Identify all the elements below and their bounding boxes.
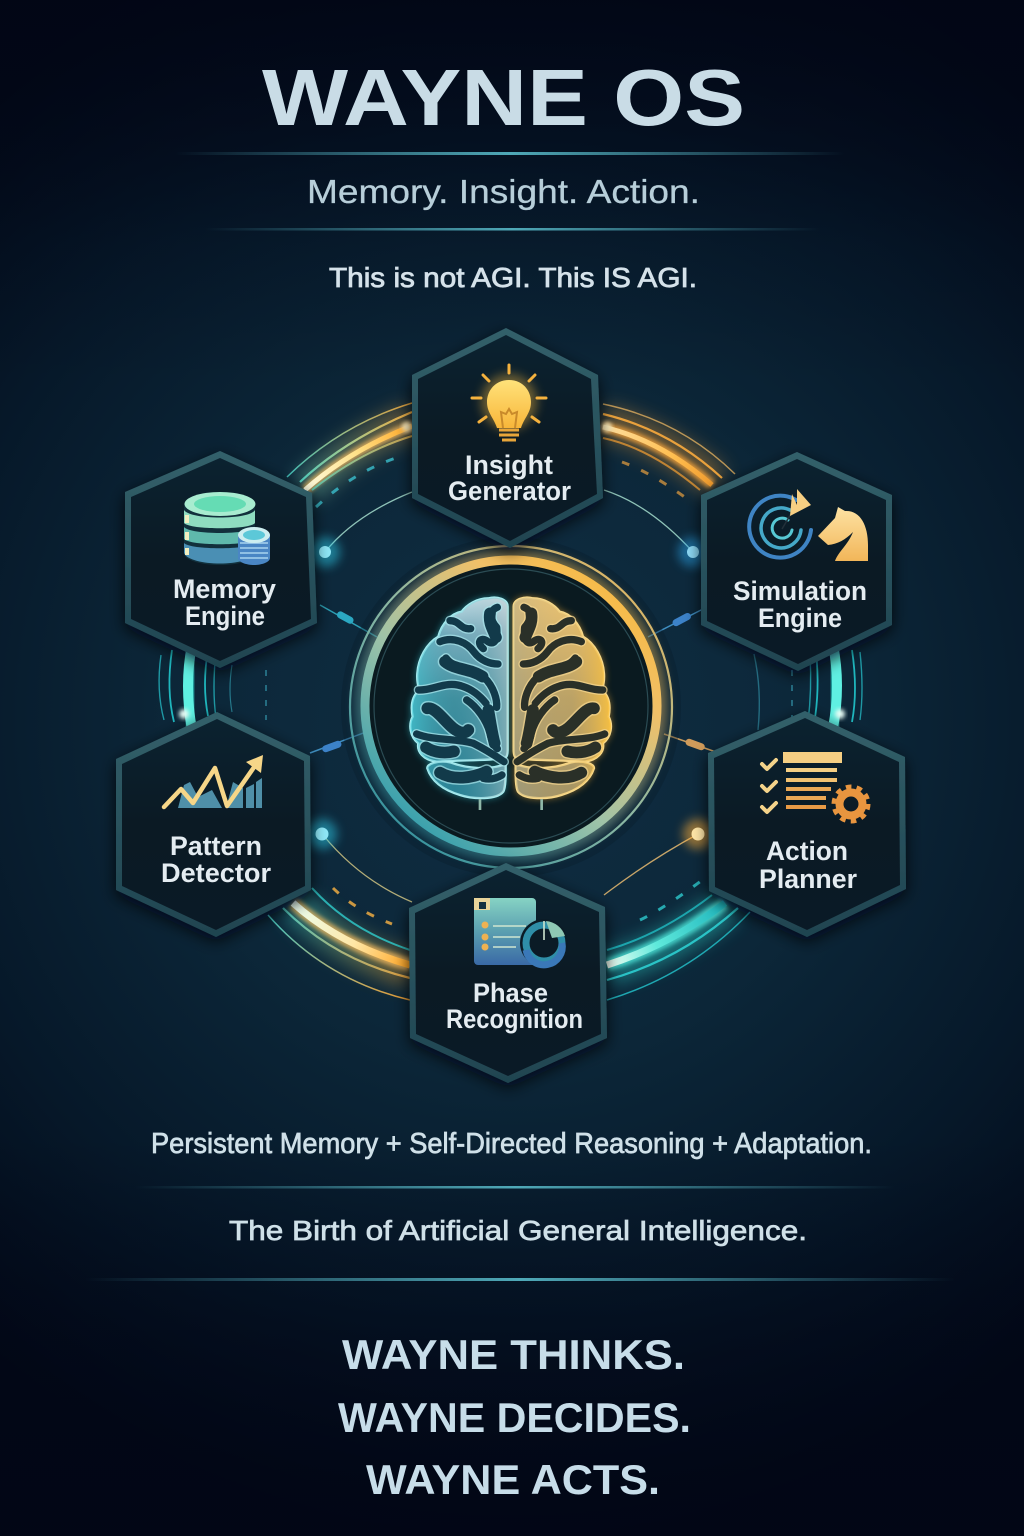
- arc: left side: [159, 645, 266, 730]
- label: Pattern Detector: [161, 831, 271, 888]
- hexagon: Simulation Engine: [701, 452, 892, 671]
- glowing nodes: [307, 537, 713, 849]
- label: Simulation Engine: Engine: [758, 603, 842, 633]
- closing statements: [338, 1331, 691, 1503]
- label: Phase Recognition: Phase: [473, 978, 548, 1008]
- label: Pattern Detector: Detector: [161, 858, 271, 888]
- connector: memory to core: [320, 605, 377, 637]
- divider: under title: [175, 152, 845, 155]
- arc: bottom right: [607, 878, 750, 1000]
- arc: top right: [602, 404, 735, 498]
- label: Memory Engine: [173, 574, 276, 631]
- icon: checklist and gear: [762, 752, 868, 821]
- label: Memory Engine: Memory: [173, 574, 276, 604]
- tagline: Memory. Insight. Action.: [307, 173, 700, 210]
- hexagon: Action Planner: [708, 711, 906, 937]
- label: Phase Recognition: [446, 978, 583, 1034]
- icon: target and knight: [749, 489, 868, 561]
- formula line: Persistent Memory + Self-Directed Reasoning + Adaptation.: [151, 1128, 872, 1160]
- hexagon: Phase Recognition: [409, 863, 607, 1083]
- divider: under tagline: [205, 228, 820, 230]
- statement: This is not AGI. This IS AGI.: [329, 262, 697, 293]
- closing statements: WAYNE DECIDES.: [338, 1394, 691, 1441]
- label: Insight Generator: Generator: [448, 476, 571, 506]
- label: Simulation Engine: [733, 576, 867, 633]
- arc: bottom left: [268, 888, 410, 1000]
- node connectors: [310, 490, 716, 902]
- icon: light bulb: [472, 365, 546, 440]
- label: Insight Generator: [448, 450, 571, 506]
- label: Simulation Engine: Simulation: [733, 576, 867, 606]
- connector: action to core: [664, 734, 716, 752]
- birth line: The Birth of Artificial General Intelligence.: [229, 1215, 807, 1246]
- closing statements: WAYNE THINKS.: [342, 1331, 685, 1378]
- divider: under formula: [135, 1186, 895, 1188]
- label: Insight Generator: Insight: [465, 450, 553, 480]
- core rings: [341, 537, 681, 877]
- label: Memory Engine: Engine: [185, 601, 265, 631]
- connector: pattern to core: [310, 723, 390, 753]
- divider: under birth line: [85, 1278, 955, 1281]
- arc: top left: [287, 403, 412, 507]
- orbit ring arcs: [159, 403, 862, 1000]
- title: WAYNE OS: [262, 53, 745, 142]
- label: Phase Recognition: Recognition: [446, 1004, 583, 1034]
- icon: database: [184, 492, 270, 565]
- label: Action Planner: [759, 836, 857, 894]
- label: Action Planner: Planner: [759, 864, 857, 894]
- icon: phase panel and dial: [474, 898, 568, 967]
- central core: [341, 537, 681, 877]
- arc: right side: [754, 645, 862, 730]
- label: Pattern Detector: Pattern: [170, 831, 262, 861]
- hexagon: Insight Generator: [412, 328, 603, 548]
- label: Action Planner: Action: [766, 836, 848, 866]
- hexagon: Memory Engine: [125, 451, 317, 668]
- connector: simulation to core: [648, 607, 707, 637]
- hexagon: Pattern Detector: [116, 712, 311, 937]
- closing statements: WAYNE ACTS.: [366, 1456, 660, 1503]
- brain right hemisphere: [514, 598, 611, 798]
- brain left hemisphere: [410, 598, 508, 798]
- brain: [410, 598, 611, 810]
- icon: trend chart: [164, 755, 263, 808]
